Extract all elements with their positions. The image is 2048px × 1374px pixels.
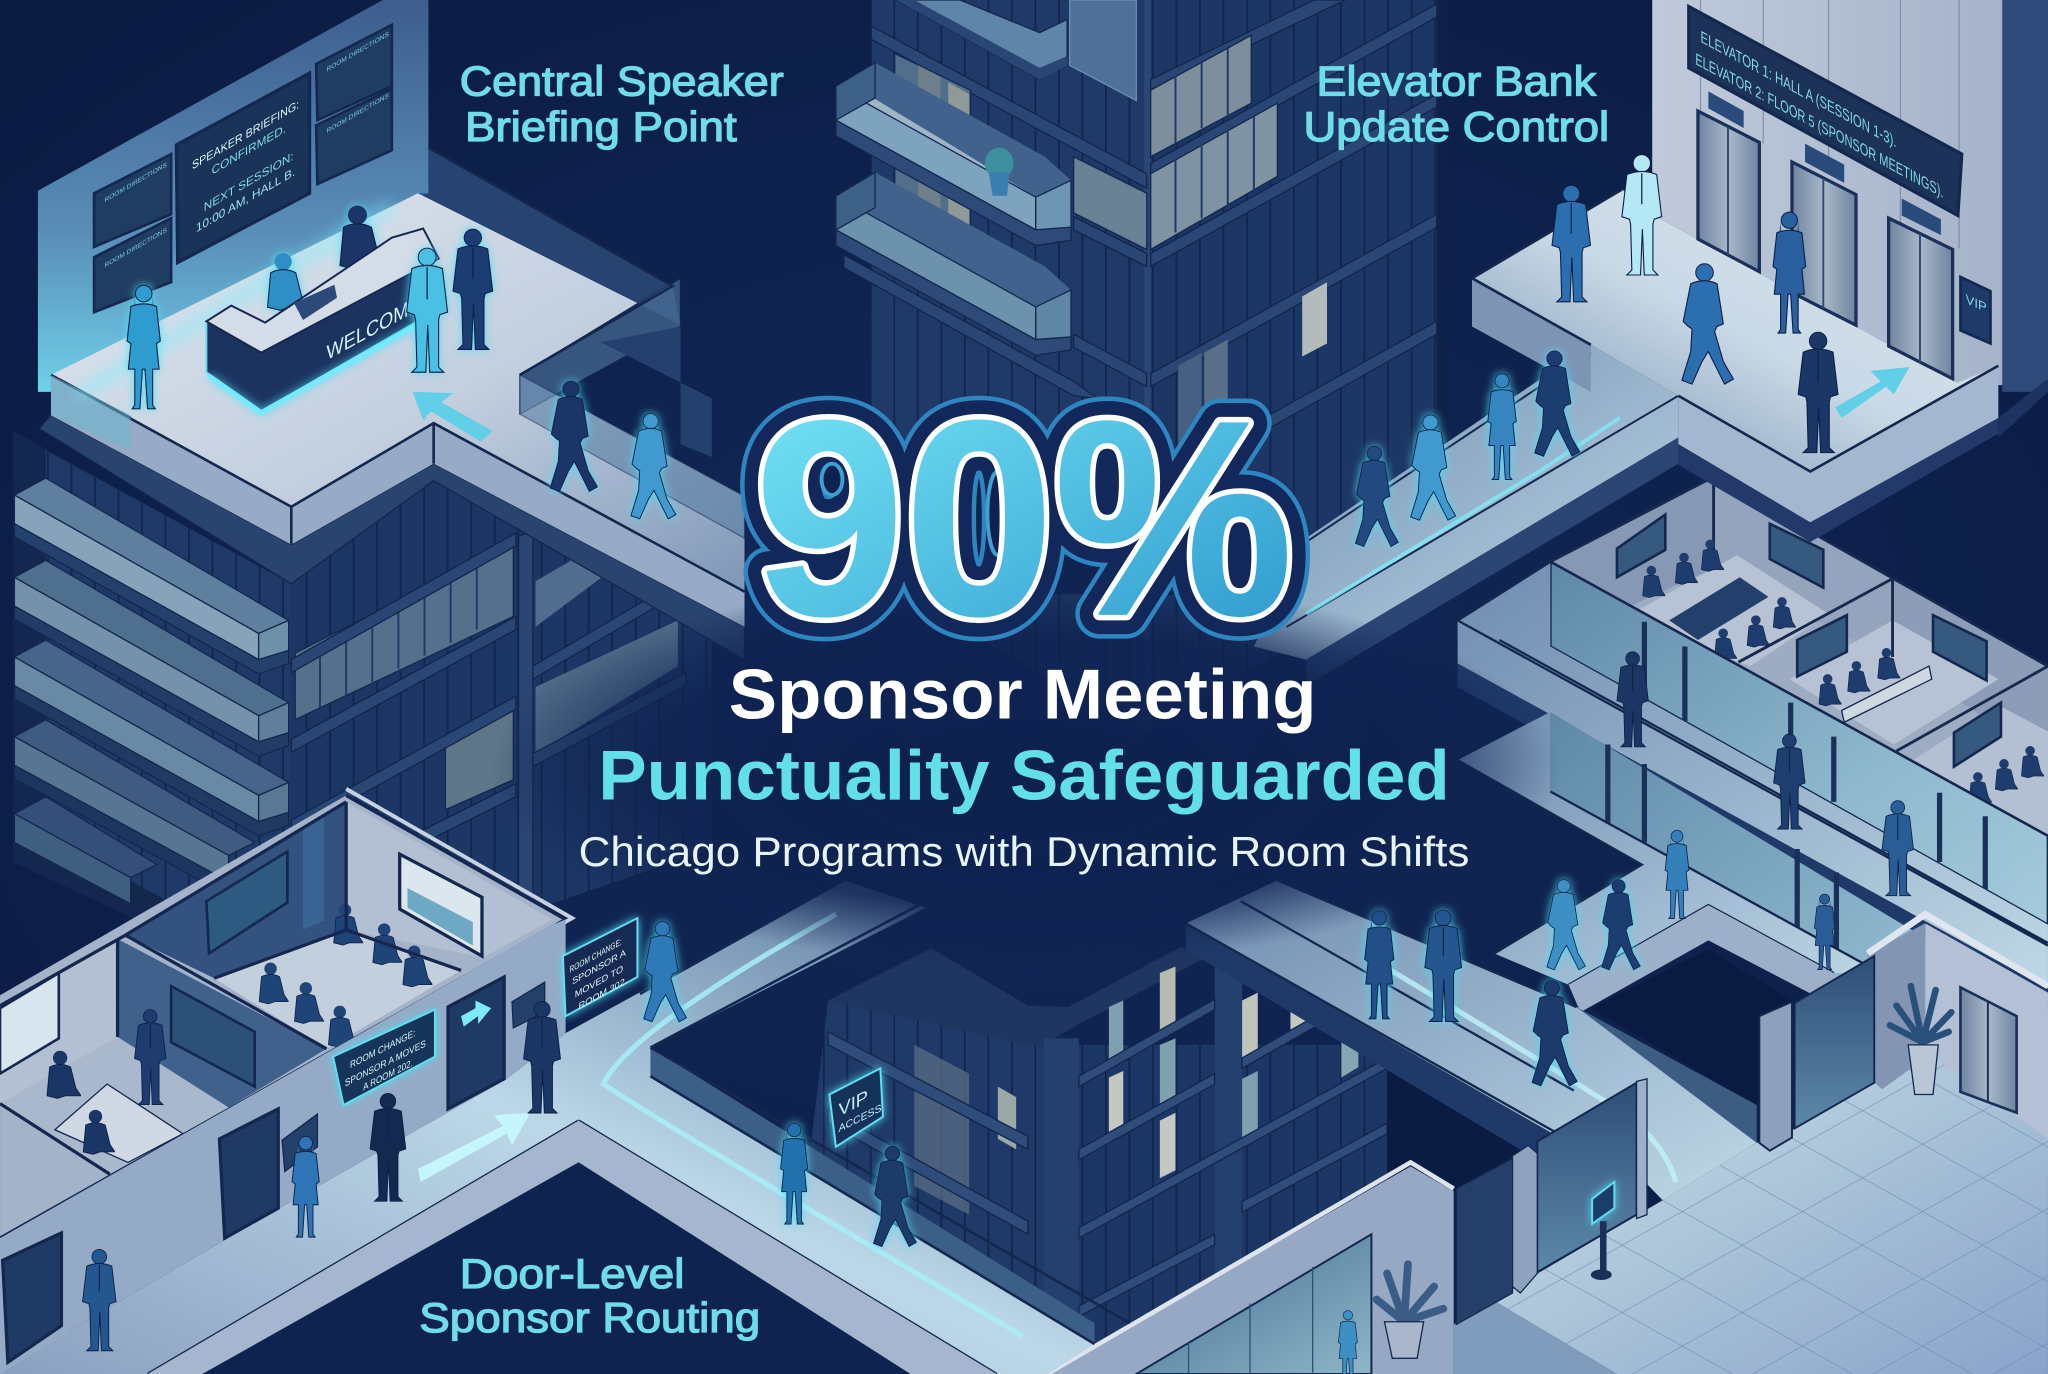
icon: VIP access sign: VIP (839, 1086, 868, 1121)
left building below speaker platform (13, 431, 712, 993)
reception desk: WELCOME (327, 290, 421, 365)
person: woman with tablet (127, 285, 160, 409)
icon: VIP access sign (829, 1068, 883, 1147)
people in corridor (83, 922, 916, 1351)
screens: room directions: ROOM DIRECTIONS (327, 92, 389, 135)
label: elevator bank update control (1304, 57, 1609, 150)
dark void under bridge (1387, 1051, 1550, 1191)
people on walkway (550, 381, 676, 519)
people on right walkways (1617, 652, 1913, 970)
screen: speaker briefing: 10:00 AM, HALL B. (196, 165, 295, 235)
walkway from centre to elevator bank (1254, 345, 1678, 686)
people on lower-right bridge (1365, 880, 1640, 1086)
screen: speaker briefing: NEXT SESSION: (204, 149, 294, 214)
panel: right-side offices lower level (1458, 712, 2048, 1175)
lower-centre room wall with plant (1045, 1162, 1454, 1374)
arrow: to door (418, 1113, 530, 1182)
floating sign: room change: ROOM CHANGE: (569, 937, 622, 976)
glass entrance to bridge (1456, 1079, 1647, 1324)
people near elevators (1552, 155, 1838, 453)
label: door-level sponsor routing: Door-Level (460, 1250, 684, 1297)
label: central speaker briefing point: Central Speaker (460, 57, 784, 104)
room B (0, 939, 118, 1104)
lobby tiled floor (1454, 1051, 2048, 1374)
label: elevator bank update control: Update Control (1304, 103, 1609, 150)
stat: 90%: 90% (755, 363, 1293, 673)
panel: elevator bank (1355, 0, 2048, 546)
arrow: to desk (413, 392, 492, 441)
room A (125, 802, 346, 978)
floating sign: room change: SPONSOR A (572, 948, 626, 988)
icon: VIP access sign: ACCESS (839, 1102, 881, 1135)
panel: door-level rooms: ROOM CHANGE: (350, 1028, 415, 1071)
central lower tower (784, 947, 1387, 1374)
label: central speaker briefing point: Briefing Point (465, 103, 737, 150)
arrow on door (461, 1000, 491, 1027)
icon: kiosk (1591, 1182, 1614, 1280)
screen: speaker briefing: CONFIRMED. (212, 122, 286, 178)
icon: VIP sign: VIP (1966, 292, 1987, 315)
panel: door-level rooms (0, 789, 916, 1374)
people on walkway (1355, 351, 1580, 546)
lobby walls and elevator (1759, 914, 2048, 1151)
arrow: to elevators (1835, 367, 1910, 418)
person: guest (407, 248, 448, 372)
label: central speaker briefing point (460, 57, 784, 150)
stat: 90%: 90% (755, 363, 1293, 673)
screens: room directions (94, 25, 392, 312)
corridor wall (0, 919, 566, 1374)
screens: room directions: ROOM DIRECTIONS (105, 162, 167, 204)
void and glass over lower opening (1576, 950, 1795, 1143)
floating sign: room change: MOVED TO (575, 964, 623, 1001)
person: guest dark (453, 229, 493, 349)
label: door-level sponsor routing: Sponsor Routing (419, 1294, 760, 1341)
screens: room directions: ROOM DIRECTIONS (105, 227, 167, 270)
heading: punctuality safeguarded: Punctuality Safeguarded (598, 735, 1450, 814)
panel: right-side offices upper level (1458, 477, 2048, 1012)
panel: door-level rooms: A ROOM 202. (363, 1058, 413, 1093)
panel: central speaker briefing point (38, 0, 744, 660)
icon: lobby plant (1890, 986, 1951, 1094)
icon: balcony plant (985, 148, 1014, 196)
stat: 90%: 90% (755, 363, 1293, 673)
screen: speaker briefing: SPEAKER BRIEFING: (192, 97, 299, 173)
label: door-level sponsor routing (419, 1250, 760, 1341)
floating sign: room change (563, 918, 637, 1016)
balcony: lower (836, 172, 1071, 355)
central text backdrop (490, 575, 1561, 967)
balconies on left face (14, 478, 289, 904)
lower-right main bridge (1186, 880, 1757, 1200)
people behind desk (268, 205, 385, 310)
label: elevator bank update control: Elevator Bank (1317, 57, 1596, 104)
panel: door-level rooms: SPONSOR A MOVES (345, 1039, 426, 1089)
screens: room directions: ROOM DIRECTIONS (327, 31, 389, 74)
screen: speaker briefing (176, 73, 310, 263)
subheading: Chicago Programs with Dynamic Room Shifts (579, 828, 1469, 875)
balcony: upper (836, 63, 1071, 246)
heading: sponsor meeting: Sponsor Meeting (729, 654, 1317, 733)
floating sign: room change: ROOM 302. (579, 975, 627, 1012)
central upper tower (836, 0, 1448, 731)
stat: 90%: 90% (755, 363, 1293, 673)
icon: VIP sign (1960, 277, 1991, 344)
sign: elevator update board: ELEVATOR 1: HALL A (SESSION 1-3). (1701, 27, 1896, 151)
corridor and void below (0, 880, 1130, 1374)
reception desk (206, 229, 439, 413)
